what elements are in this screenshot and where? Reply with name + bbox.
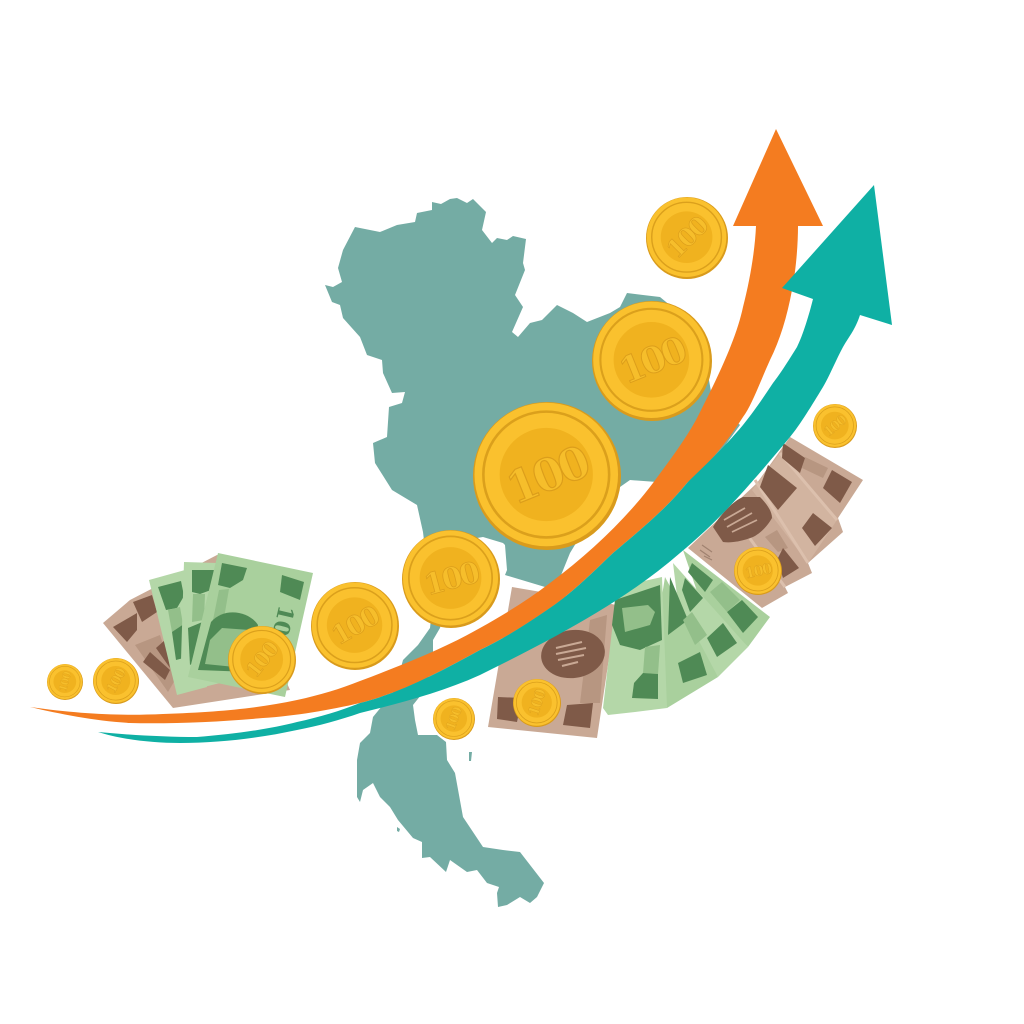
coin: centre [402,530,500,628]
coin: on left notes: 100 [241,637,284,682]
coin: on peninsula: 100 [443,704,465,732]
coin: centre: 100 [420,554,483,602]
green note front [188,553,313,697]
brown note back [103,555,290,708]
coin: large: 100 [499,436,596,515]
arrow: teal [98,185,892,743]
brown note lower [488,587,617,738]
map silhouette [325,198,740,907]
coin: on brown notes [734,547,782,595]
coin: on brown notes: 100 [743,560,774,582]
coin: on lower brown note: 100 [525,687,550,718]
coin: top right: 100 [661,211,714,264]
brown notes upper [688,437,863,608]
coin: centre left: 100 [326,600,385,652]
coin: on lower brown note [513,679,561,727]
coin: top right [646,197,728,279]
coin: large [473,402,621,550]
coin: upper centre [592,301,712,421]
banknotes: right fan [488,437,863,738]
coin: smallest left [47,664,83,700]
banknotes: left fan [103,553,313,708]
coin: right small [813,404,857,448]
coin: smallest left: 100 [56,670,74,693]
green note two [180,562,220,693]
green note one [149,570,207,695]
note denomination: 100 [263,603,299,654]
coin: small left: 100 [104,666,130,696]
coin: upper centre: 100 [613,328,692,393]
coin: on left notes [228,626,296,694]
coin: small left [93,658,139,704]
coin: on peninsula [433,698,475,740]
coin: centre left [311,582,399,670]
coin: right small: 100 [821,413,850,440]
arrow: orange [30,129,823,723]
green notes [683,550,770,647]
